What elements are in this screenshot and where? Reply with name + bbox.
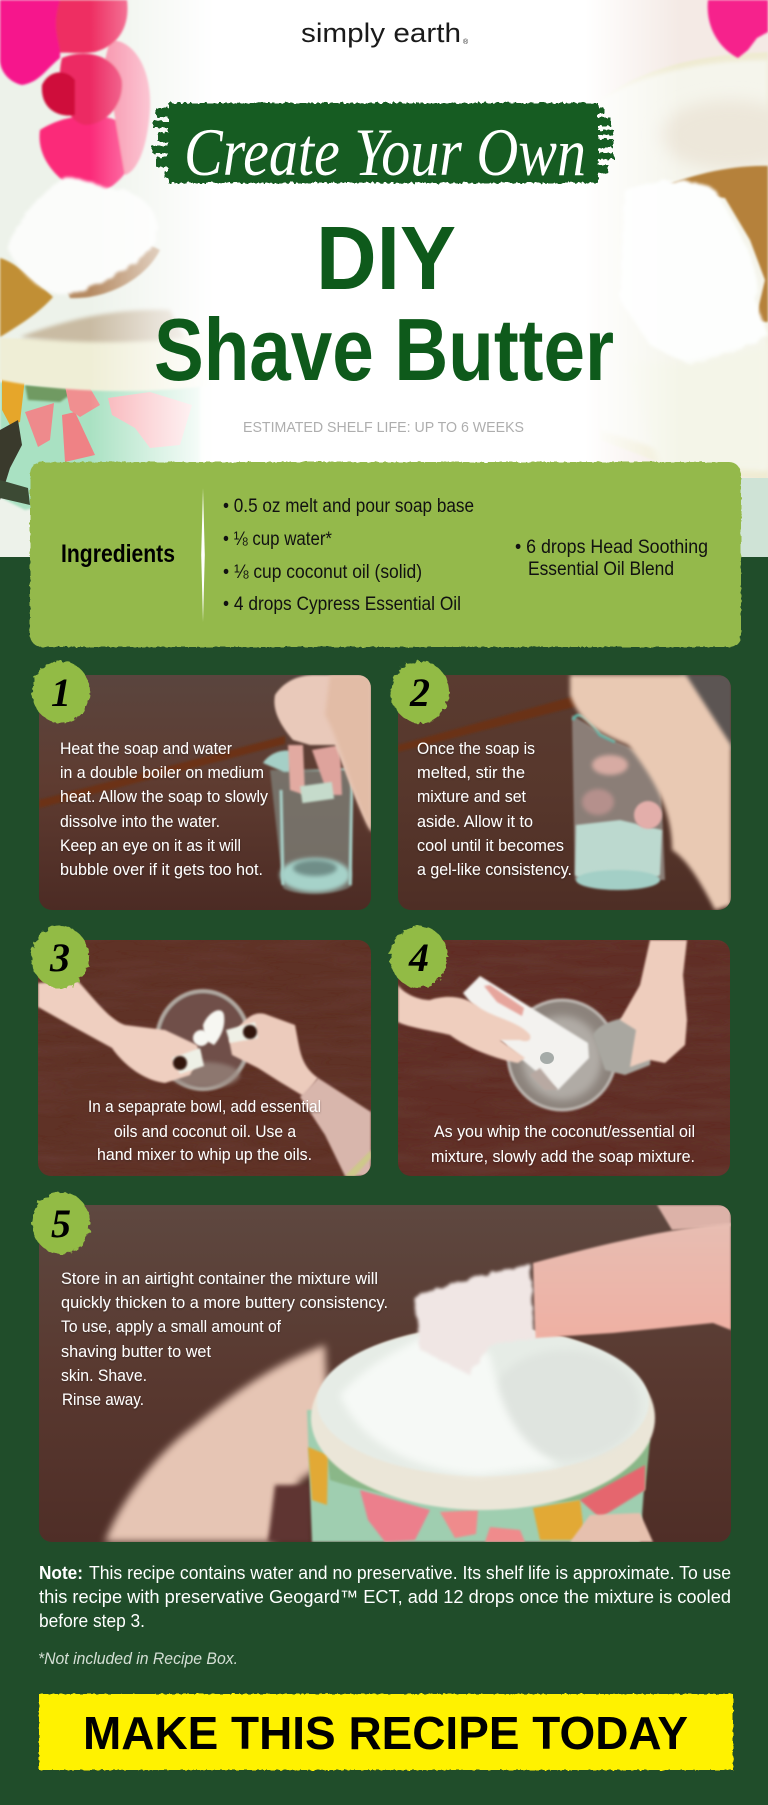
residue on lid bbox=[20, 310, 185, 342]
call to action bbox=[39, 1694, 733, 1770]
main title: Shave Butter bbox=[154, 300, 614, 399]
panel: ingredients bbox=[30, 462, 741, 647]
step 2 text bbox=[417, 739, 572, 879]
brush banner bbox=[152, 103, 614, 190]
step 1 text: heat. Allow the soap to slowly bbox=[60, 787, 268, 806]
main title bbox=[154, 209, 614, 399]
spoon bbox=[0, 258, 53, 337]
step badge 3 bbox=[31, 926, 89, 988]
step badge 3: 3 bbox=[49, 935, 70, 980]
panel: step 4 bbox=[398, 940, 730, 1176]
main title: DIY bbox=[316, 209, 456, 309]
step 2 text: Once the soap is bbox=[417, 739, 535, 758]
step 1 text: bubble over if it gets too hot. bbox=[60, 860, 263, 879]
step 5 text: skin. Shave. bbox=[61, 1366, 147, 1385]
banner title: Create Your Own bbox=[184, 114, 586, 190]
step 3 text: oils and coconut oil. Use a bbox=[114, 1122, 296, 1141]
shelf life: ESTIMATED SHELF LIFE: UP TO 6 WEEKS bbox=[243, 419, 524, 436]
note text: This recipe contains water and no preservative. Its shelf life is approximate. To use bbox=[89, 1563, 731, 1583]
step 4 text: mixture, slowly add the soap mixture. bbox=[431, 1147, 695, 1166]
step 5 text: Store in an airtight container the mixture will bbox=[61, 1269, 378, 1288]
step badge 4 bbox=[390, 926, 448, 988]
step 2 text: mixture and set bbox=[417, 787, 526, 806]
step badge 4: 4 bbox=[408, 935, 429, 980]
step 1 text: Keep an eye on it as it will bbox=[60, 836, 241, 855]
ingredient list: • 6 drops Head Soothing bbox=[515, 537, 708, 558]
jar base bbox=[0, 382, 200, 510]
panel: step 3 bbox=[38, 940, 371, 1176]
step 2 text: aside. Allow it to bbox=[417, 812, 533, 831]
step badge 1: 1 bbox=[51, 670, 71, 715]
ingredient list: • ⅛ cup water* bbox=[223, 529, 333, 550]
step 2 text: cool until it becomes bbox=[417, 836, 564, 855]
ingredient list: • ⅛ cup coconut oil (solid) bbox=[223, 562, 422, 583]
step 5 text: Rinse away. bbox=[62, 1390, 144, 1409]
step 3 text: In a sepaprate bowl, add essential bbox=[88, 1097, 321, 1116]
step 5 text: shaving butter to wet bbox=[61, 1342, 211, 1361]
ingredient list: • 0.5 oz melt and pour soap base bbox=[223, 496, 474, 517]
ingredients heading: Ingredients bbox=[61, 540, 175, 568]
step badge 5: 5 bbox=[51, 1201, 71, 1246]
logo: simply earth bbox=[301, 18, 461, 48]
step 5 text: quickly thicken to a more buttery consistency. bbox=[61, 1293, 388, 1312]
note text: Note: bbox=[39, 1563, 83, 1583]
panel: step 1 bbox=[39, 675, 371, 910]
call to action: MAKE THIS RECIPE TODAY bbox=[83, 1707, 688, 1759]
note text: this recipe with preservative Geogard™ ECT, add 12 drops once the mixture is cooled bbox=[39, 1587, 731, 1607]
step 4 text bbox=[431, 1122, 695, 1166]
logo: ® bbox=[463, 38, 469, 46]
note text bbox=[39, 1563, 731, 1631]
photo: right side jar with butter bbox=[603, 0, 768, 557]
butter on spoon bbox=[8, 178, 158, 295]
step badge 2 bbox=[391, 661, 449, 723]
ingredient list: Essential Oil Blend bbox=[528, 559, 674, 580]
step badge 5 bbox=[32, 1192, 90, 1254]
footnote: *Not included in Recipe Box. bbox=[38, 1649, 238, 1668]
step 2 text: melted, stir the bbox=[417, 763, 525, 782]
lid bbox=[0, 338, 198, 392]
ingredient list: • 4 drops Cypress Essential Oil bbox=[223, 594, 461, 615]
step 1 text: dissolve into the water. bbox=[60, 812, 220, 831]
step 2 text: a gel-like consistency. bbox=[417, 860, 572, 879]
ingredient list bbox=[223, 496, 708, 615]
photo: left side flower, spoon and jar bbox=[0, 0, 199, 557]
step badge 2: 2 bbox=[409, 670, 430, 715]
step 3 text: hand mixer to whip up the oils. bbox=[97, 1145, 312, 1164]
step 1 text bbox=[60, 739, 268, 879]
step 5 text bbox=[61, 1269, 388, 1409]
step 4 text: As you whip the coconut/essential oil bbox=[434, 1122, 695, 1141]
panel: step 2 bbox=[398, 675, 731, 910]
step 1 text: Heat the soap and water bbox=[60, 739, 232, 758]
step badge 1 bbox=[32, 661, 90, 723]
step 1 text: in a double boiler on medium bbox=[60, 763, 264, 782]
note text: before step 3. bbox=[39, 1611, 145, 1631]
panel: step 5 bbox=[39, 1205, 731, 1542]
header photo background bbox=[0, 0, 768, 557]
step 3 text bbox=[88, 1097, 321, 1164]
step 5 text: To use, apply a small amount of bbox=[61, 1317, 281, 1336]
